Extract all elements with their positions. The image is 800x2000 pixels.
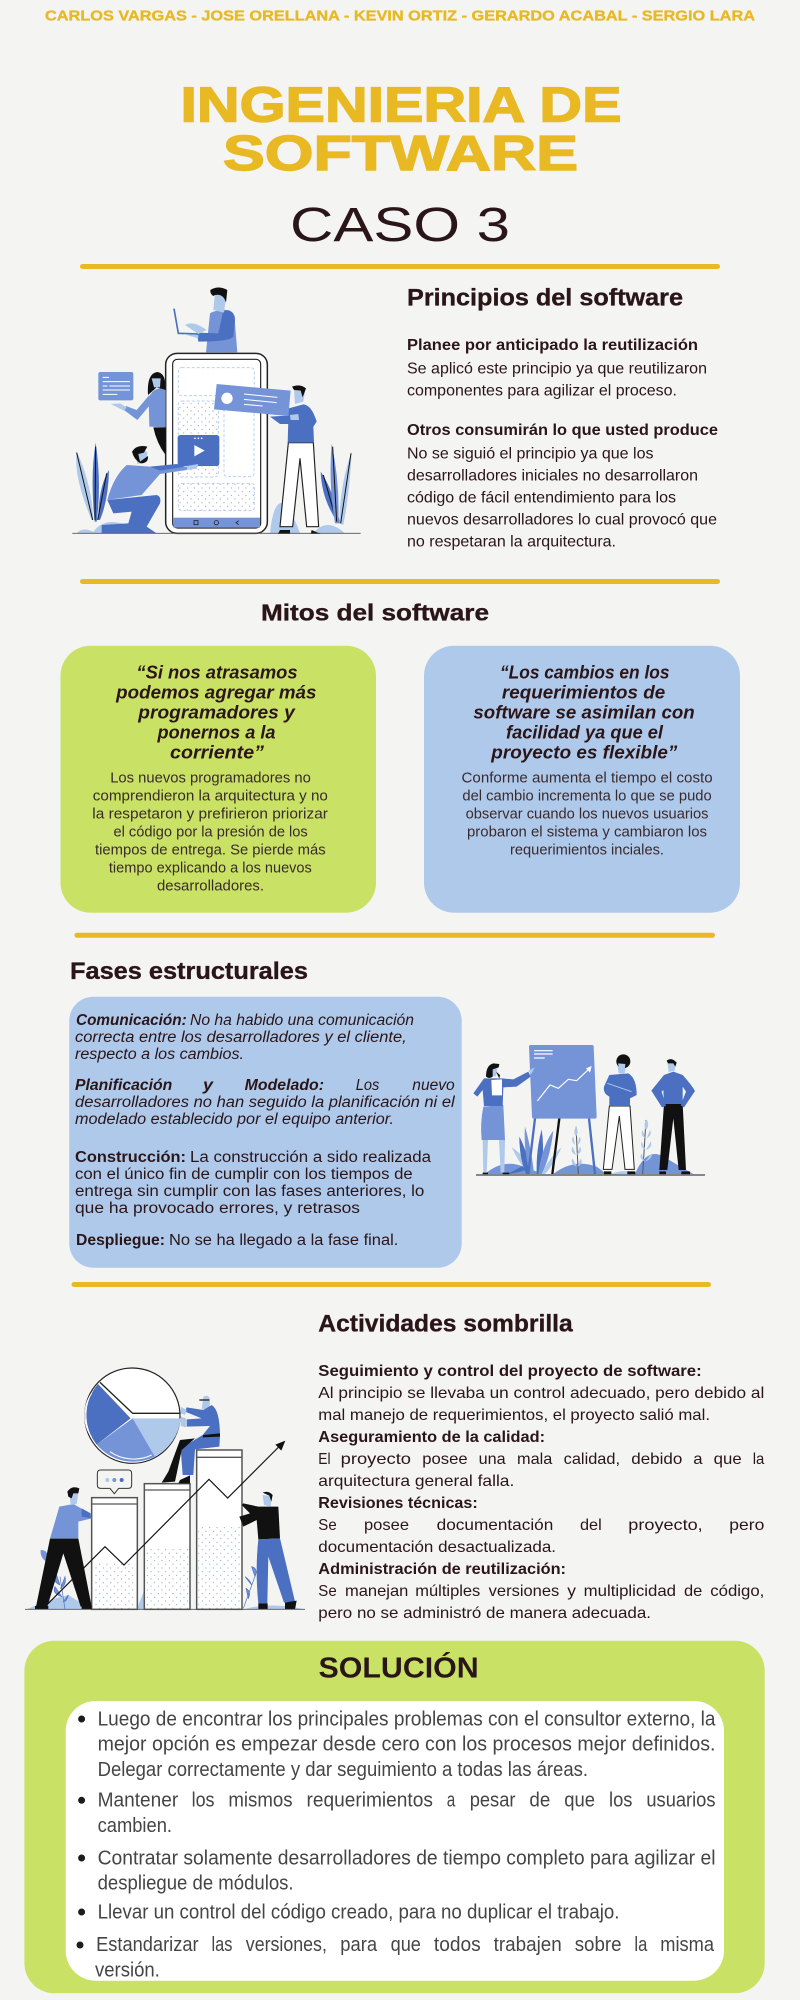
- pie chart: [85, 1368, 181, 1463]
- construccion: entrega sin cumplir con las fases anteriores, lo: [75, 1183, 424, 1200]
- person with laptop: [174, 287, 237, 352]
- panel: actividades sombrilla: mal manejo de requerimientos, el proyecto salió mal.: [318, 1407, 710, 1424]
- man left: [35, 1487, 92, 1609]
- bullet 2: a: [447, 1789, 456, 1811]
- planificacion: modelado establecido por el equipo anterior.: [75, 1111, 394, 1128]
- man right: [239, 1492, 297, 1609]
- panel: actividades sombrilla: documentación desactualizada.: [318, 1539, 556, 1556]
- panel: actividades sombrilla: y: [567, 1583, 576, 1600]
- bullet 5: todos: [434, 1934, 481, 1956]
- quote: facilidad ya que el: [506, 721, 664, 742]
- authors line: CARLOS VARGAS - JOSE ORELLANA - KEVIN ORTIZ - GERARDO ACABAL - SERGIO LARA: [45, 8, 756, 24]
- panel: actividades sombrilla: la: [753, 1451, 764, 1468]
- panel: actividades sombrilla: una: [479, 1451, 506, 1468]
- panel: actividades sombrilla: múltiples: [415, 1583, 480, 1600]
- panel: actividades sombrilla: Aseguramiento de la calidad:: [318, 1429, 545, 1446]
- explanation: observar cuando los nuevos usuarios: [466, 805, 708, 822]
- despliegue: [76, 1232, 398, 1249]
- bullet 5: las: [212, 1934, 232, 1956]
- bullet 2: requerimientos: [306, 1789, 433, 1811]
- bullet 2: [78, 1789, 716, 1837]
- bullet 1: [78, 1709, 716, 1781]
- bullet 2: mismos: [228, 1789, 293, 1811]
- panel: principios del software: código de fácil entendimiento para los: [407, 489, 676, 506]
- panel: actividades sombrilla: pero: [729, 1517, 764, 1534]
- quote: “Los cambios en los: [500, 661, 670, 682]
- kneeling man: [102, 446, 198, 533]
- planificacion: y: [202, 1077, 215, 1094]
- bullet 2: usuarios: [646, 1789, 716, 1811]
- bullet 3: despliegue de módulos.: [98, 1872, 294, 1894]
- despliegue: No se ha llegado a la fase final.: [169, 1232, 398, 1249]
- man arms crossed: [603, 1054, 637, 1175]
- explanation: tiempos de entrega. Se pierde más: [95, 841, 326, 858]
- panel: actividades sombrilla: [318, 1311, 764, 1622]
- bullet 2: pesar: [470, 1789, 516, 1811]
- panel: actividades sombrilla: código,: [710, 1583, 764, 1600]
- quote: ponernos a la: [157, 721, 276, 742]
- heading: SOLUCIÓN: [318, 1651, 479, 1685]
- panel: principios del software: Otros consumirán lo que usted produce: [407, 422, 718, 439]
- quote: software se asimilan con: [473, 701, 695, 722]
- panel: actividades sombrilla: posee: [422, 1451, 468, 1468]
- presentation board: [528, 1045, 597, 1174]
- bullet 2: Mantener: [98, 1789, 179, 1811]
- bullet 3: [78, 1847, 716, 1894]
- quote: “Si nos atrasamos: [136, 661, 298, 682]
- speech bubble: [97, 1470, 132, 1494]
- despliegue: Despliegue:: [76, 1232, 165, 1249]
- seated man: [162, 1396, 220, 1483]
- woman with message card: [98, 372, 166, 455]
- man holding card: [214, 384, 321, 534]
- trend arrow: [45, 1441, 285, 1607]
- bullet 4: Llevar un control del código creado, para no duplicar el trabajo.: [98, 1901, 620, 1923]
- subtitle: CASO 3: [290, 199, 510, 252]
- construccion: [75, 1149, 431, 1217]
- bullet 2: los: [609, 1789, 632, 1811]
- illustration: growth charts and team: [25, 1368, 305, 1609]
- panel: actividades sombrilla: del: [580, 1517, 602, 1534]
- panel: myth card blue: [424, 646, 740, 913]
- bullet 5: versión.: [95, 1960, 160, 1982]
- phone: [166, 353, 267, 533]
- illustration: team presenting a chart: [473, 1045, 705, 1175]
- heading: Principios del software: [407, 284, 683, 312]
- bullet 5: trabajen: [494, 1934, 562, 1956]
- heading: mitos del software: Mitos del software: [261, 600, 489, 626]
- panel: actividades sombrilla: que: [714, 1451, 742, 1468]
- planificacion: desarrolladores no han seguido la planificación ni el: [75, 1094, 455, 1111]
- explanation: la respetaron y prefirieron priorizar: [92, 805, 328, 822]
- panel: principios del software: No se siguió el principio ya que los: [407, 446, 654, 463]
- panel: actividades sombrilla: arquitectura general falla.: [318, 1473, 514, 1490]
- bullet 3: Contratar solamente desarrolladores de tiempo completo para agilizar el: [98, 1847, 716, 1869]
- panel: solucion: [24, 1641, 765, 1993]
- panel: principios del software: Se aplicó este principio ya que reutilizaron: [407, 360, 707, 377]
- construccion: con el único fin de cumplir con los tiempos de: [75, 1166, 413, 1183]
- planificacion: Modelado:: [245, 1077, 324, 1094]
- panel: actividades sombrilla: pero no se administró de manera adecuada.: [318, 1605, 651, 1622]
- bullet 5: Estandarizar: [96, 1934, 199, 1956]
- panel: actividades sombrilla: Revisiones técnicas:: [318, 1495, 478, 1512]
- panel: principios del software: no respetaran la arquitectura.: [407, 533, 616, 550]
- panel: actividades sombrilla: de: [684, 1583, 702, 1600]
- bullet 2: que: [564, 1789, 595, 1811]
- explanation: el código por la presión de los: [114, 823, 308, 840]
- bars: [92, 1450, 242, 1609]
- planificacion: nuevo: [412, 1077, 455, 1094]
- panel: principios del software: Planee por anticipado la reutilización: [407, 337, 698, 354]
- comunicacion: Comunicación:: [76, 1012, 187, 1029]
- title: [180, 78, 622, 181]
- explanation: requerimientos inciales.: [510, 841, 664, 858]
- explanation: Conforme aumenta el tiempo el costo: [462, 769, 713, 786]
- bullet 5: versiones,: [246, 1934, 327, 1956]
- panel: actividades sombrilla: a: [693, 1451, 703, 1468]
- quote: proyecto es flexible”: [490, 741, 678, 762]
- construccion: Construcción:: [75, 1149, 186, 1166]
- panel: myth card green: [60, 646, 376, 913]
- heading: Actividades sombrilla: [318, 1311, 573, 1338]
- title: SOFTWARE: [223, 127, 578, 181]
- panel: principios del software: [407, 284, 718, 550]
- heading: fases estructurales: Fases estructurales: [70, 958, 308, 985]
- construccion: La construcción a sido realizada: [190, 1149, 431, 1166]
- quote: programadores y: [137, 701, 297, 722]
- quote: requerimientos de: [502, 681, 665, 702]
- panel: actividades sombrilla: Administración de reutilización:: [318, 1561, 566, 1578]
- panel: actividades sombrilla: multiplicidad: [584, 1583, 676, 1600]
- quote: [115, 661, 316, 762]
- quote: corriente”: [170, 741, 265, 762]
- woman presenting: [473, 1063, 535, 1175]
- bullet 2: los: [192, 1789, 214, 1811]
- bullet 5: sobre: [575, 1934, 622, 1956]
- panel: actividades sombrilla: Se: [318, 1583, 337, 1600]
- panel: actividades sombrilla: mala: [517, 1451, 552, 1468]
- panel: principios del software: nuevos desarrolladores lo cual provocó que: [407, 511, 717, 528]
- panel: actividades sombrilla: proyecto,: [628, 1517, 703, 1534]
- bullet 5: que: [391, 1934, 421, 1956]
- comunicacion: respecto a los cambios.: [75, 1046, 244, 1063]
- panel: actividades sombrilla: versiones: [489, 1583, 559, 1600]
- explanation: probaron el sistema y cambiaron los: [467, 823, 707, 840]
- bullet 1: Luego de encontrar los principales problemas con el consultor externo, la: [98, 1709, 716, 1731]
- explanation: [462, 769, 713, 858]
- quote: [473, 661, 695, 762]
- panel: actividades sombrilla: Seguimiento y control del proyecto de software:: [318, 1363, 702, 1380]
- panel: actividades sombrilla: posee: [364, 1517, 409, 1534]
- panel: fases: [69, 997, 462, 1268]
- title: INGENIERIA DE: [180, 78, 622, 132]
- panel: actividades sombrilla: Al principio se llevaba un control adecuado, pero debido al: [318, 1385, 764, 1402]
- panel: principios del software: componentes para agilizar el proceso.: [407, 382, 677, 399]
- panel: actividades sombrilla: debido: [631, 1451, 682, 1468]
- man hands on hips: [651, 1059, 695, 1175]
- panel: actividades sombrilla: manejan: [345, 1583, 408, 1600]
- illustration: team building a mobile app: [72, 287, 361, 534]
- planificacion: Los: [356, 1077, 380, 1094]
- bullet 2: cambien.: [98, 1815, 172, 1837]
- bullet 5: [76, 1934, 715, 1982]
- explanation: comprendieron la arquitectura y no: [93, 787, 328, 804]
- panel: principios del software: desarrolladores iniciales no desarrollaron: [407, 467, 698, 484]
- panel: actividades sombrilla: Se: [318, 1517, 337, 1534]
- panel: actividades sombrilla: documentación: [437, 1517, 553, 1534]
- comunicacion: No ha habido una comunicación: [190, 1012, 414, 1029]
- planificacion: Planificación: [75, 1077, 172, 1094]
- panel: actividades sombrilla: proyecto: [341, 1451, 411, 1468]
- panel: actividades sombrilla: calidad,: [564, 1451, 620, 1468]
- explanation: tiempo explicando a los nuevos: [109, 859, 312, 876]
- explanation: desarrolladores.: [157, 877, 264, 894]
- construccion: que ha provocado errores, y retrasos: [75, 1200, 360, 1217]
- comunicacion: correcta entre los desarrolladores y el cliente,: [75, 1029, 407, 1046]
- bullet 1: mejor opción es empezar desde cero con los procesos mejor definidos.: [98, 1733, 716, 1755]
- explanation: del cambio incrementa lo que se pudo: [462, 787, 712, 804]
- bullet 5: misma: [660, 1934, 715, 1956]
- explanation: [92, 769, 328, 894]
- explanation: Los nuevos programadores no: [110, 769, 311, 786]
- bullet 5: la: [634, 1934, 648, 1956]
- bullet 5: para: [340, 1934, 378, 1956]
- planificacion: [75, 1077, 455, 1128]
- solution list: [66, 1701, 724, 1982]
- bullet 1: Delegar correctamente y dar seguimiento a todas las áreas.: [98, 1759, 588, 1781]
- panel: actividades sombrilla: El: [318, 1451, 331, 1468]
- comunicacion: [75, 1012, 414, 1063]
- bullet 2: de: [529, 1789, 550, 1811]
- quote: podemos agregar más: [115, 681, 316, 702]
